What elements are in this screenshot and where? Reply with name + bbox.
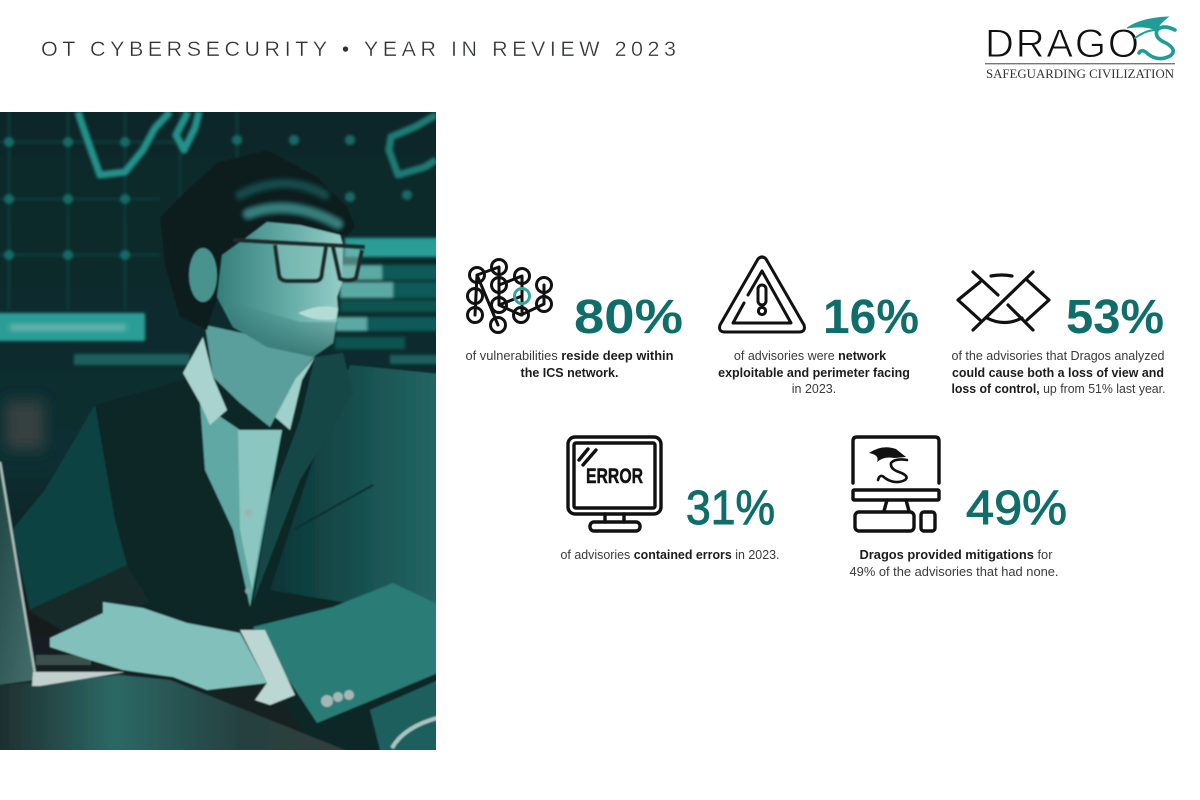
logo: Dragos bbox=[985, 17, 1175, 81]
hair highlights bbox=[240, 184, 338, 224]
shirt cuff bbox=[240, 630, 295, 705]
shirt bbox=[183, 337, 315, 607]
jacket bbox=[12, 352, 450, 770]
description: exploitable and perimeter facing bbox=[718, 366, 910, 380]
stat 2: 16% bbox=[718, 257, 919, 396]
value: 53% bbox=[1066, 291, 1164, 344]
small dragon bbox=[869, 447, 907, 482]
icon: crossed out eye bbox=[958, 272, 1049, 330]
description bbox=[466, 349, 673, 380]
logo dragon bbox=[1127, 17, 1175, 59]
beard shade bbox=[232, 312, 338, 358]
logo wordmark: DRAGO bbox=[985, 22, 1139, 66]
icon: network nodes bbox=[468, 260, 552, 332]
stat 4: 31% bbox=[560, 437, 780, 562]
hand bbox=[50, 602, 267, 690]
laptop base bbox=[32, 672, 125, 686]
description: 49% of the advisories that had none. bbox=[850, 565, 1058, 579]
laptop bbox=[0, 460, 36, 686]
description: the ICS network. bbox=[521, 366, 618, 380]
description: of advisories were network bbox=[734, 349, 886, 363]
logo rule bbox=[985, 63, 1175, 64]
description: of the advisories that Dragos analyzed bbox=[952, 349, 1165, 363]
title: OT CYBERSECURITY • YEAR IN REVIEW 2023 bbox=[41, 37, 676, 61]
keyboard strip bbox=[36, 655, 91, 665]
photo background screen bbox=[0, 112, 436, 735]
sleeve buttons bbox=[321, 690, 354, 707]
ear bbox=[189, 248, 217, 302]
description: of vulnerabilities reside deep within bbox=[466, 349, 673, 363]
glasses bbox=[233, 240, 365, 281]
description bbox=[952, 349, 1166, 396]
description: in 2023. bbox=[792, 382, 836, 396]
icon: warning triangle bbox=[720, 257, 804, 332]
stat 3: 53% bbox=[952, 272, 1166, 396]
hair back bbox=[160, 150, 355, 330]
mouth bbox=[298, 306, 338, 320]
value: 49% bbox=[966, 482, 1067, 535]
neck bbox=[205, 325, 320, 427]
value: 80% bbox=[574, 291, 683, 344]
description bbox=[718, 349, 910, 396]
value: 31% bbox=[686, 482, 775, 535]
description: of advisories contained errors in 2023. bbox=[560, 548, 780, 562]
stat 5: 49% bbox=[850, 437, 1067, 579]
icon: Dragos monitor bbox=[853, 437, 939, 531]
error label: ERROR bbox=[586, 465, 643, 488]
description bbox=[850, 548, 1058, 579]
description: Dragos provided mitigations for bbox=[860, 548, 1052, 562]
face bbox=[217, 222, 343, 357]
description: could cause both a loss of view and bbox=[952, 366, 1164, 380]
stat 1: 80% bbox=[466, 260, 683, 380]
description: loss of control, up from 51% last year. bbox=[952, 382, 1166, 396]
icon: error monitor bbox=[568, 437, 661, 531]
photo: man with glasses at a laptop bbox=[0, 112, 436, 750]
table bbox=[0, 674, 346, 750]
value: 16% bbox=[823, 291, 919, 344]
logo tagline: SAFEGUARDING CIVILIZATION bbox=[986, 66, 1175, 81]
